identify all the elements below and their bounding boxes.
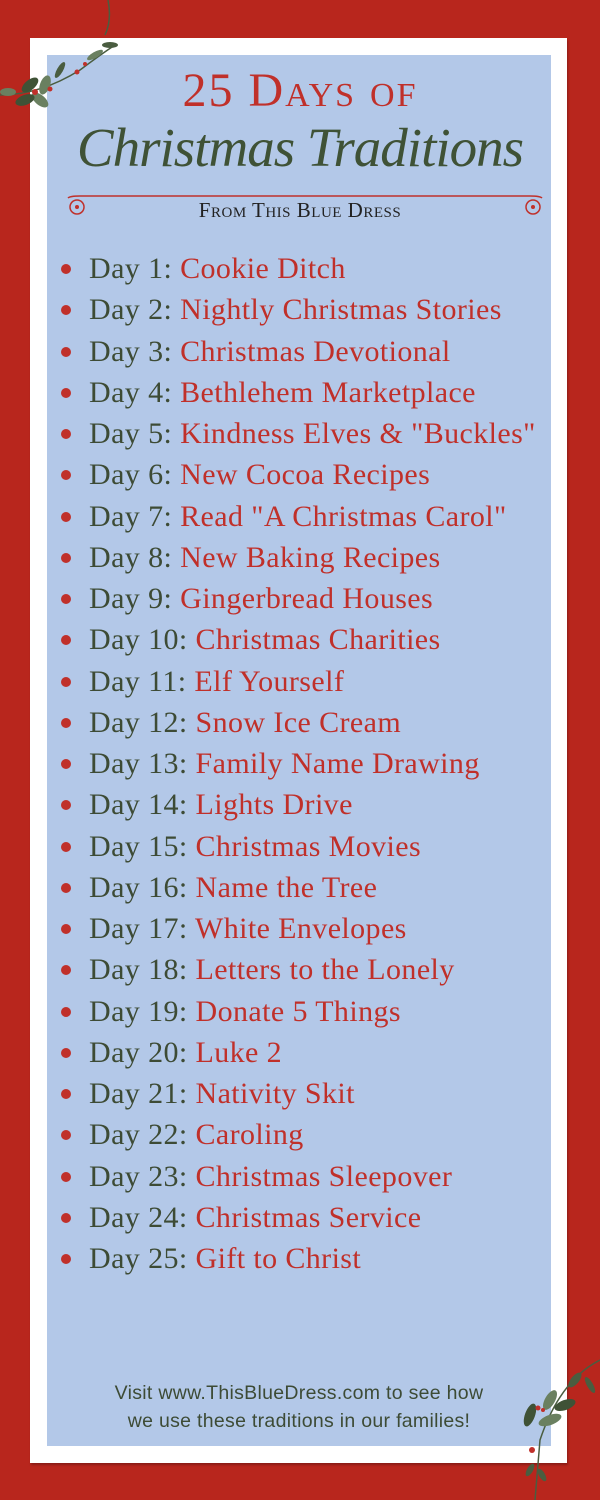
list of days: Day 5: Kindness Elves & "Buckles" (89, 417, 536, 450)
list of days: Day 3: Christmas Devotional (89, 334, 451, 368)
title: christmas traditions: Christmas Traditions (77, 117, 523, 178)
list of days: Day 17: White Envelopes (89, 912, 407, 945)
list of days: Day 8: New Baking Recipes (89, 541, 441, 574)
list of days: Day 14: Lights Drive (89, 788, 353, 821)
subtitle: From This Blue Dress (199, 198, 401, 222)
title: 25 days of: 25 Days of (182, 64, 418, 117)
list of days: Day 7: Read "A Christmas Carol" (89, 500, 507, 532)
list of days: Day 21: Nativity Skit (89, 1077, 355, 1110)
list of days: Day 6: New Cocoa Recipes (89, 458, 430, 491)
list of days: Day 22: Caroling (89, 1118, 304, 1151)
list of days: Day 16: Name the Tree (89, 871, 377, 904)
list of days: Day 4: Bethlehem Marketplace (89, 376, 476, 409)
list of days: Day 1: Cookie Ditch (89, 252, 346, 285)
footer text: Visit www.ThisBlueDress.com to see how (115, 1382, 483, 1404)
list of days: Day 20: Luke 2 (89, 1036, 282, 1069)
blue panel (47, 55, 551, 1446)
list of days: Day 13: Family Name Drawing (89, 747, 480, 780)
footer text (114, 1382, 484, 1432)
list of days: Day 10: Christmas Charities (89, 623, 441, 656)
list of days: Day 23: Christmas Sleepover (89, 1160, 452, 1192)
footer text: we use these traditions in our families! (128, 1410, 470, 1432)
list of days: Day 24: Christmas Service (89, 1201, 421, 1234)
list of days: Day 12: Snow Ice Cream (89, 706, 401, 739)
list of days: Day 18: Letters to the Lonely (89, 953, 455, 986)
icon: holly sprig top left (0, 0, 118, 108)
list of days: Day 15: Christmas Movies (89, 830, 421, 862)
list of days: Day 19: Donate 5 Things (89, 994, 401, 1028)
list of days: Day 11: Elf Yourself (89, 664, 344, 698)
list of days: Day 25: Gift to Christ (89, 1242, 361, 1275)
list of days: Day 9: Gingerbread Houses (89, 582, 433, 615)
icon: holly sprig bottom right (524, 1359, 600, 1500)
list of days: Day 2: Nightly Christmas Stories (89, 293, 502, 326)
list of days (61, 252, 536, 1275)
divider with swirls (68, 195, 542, 215)
